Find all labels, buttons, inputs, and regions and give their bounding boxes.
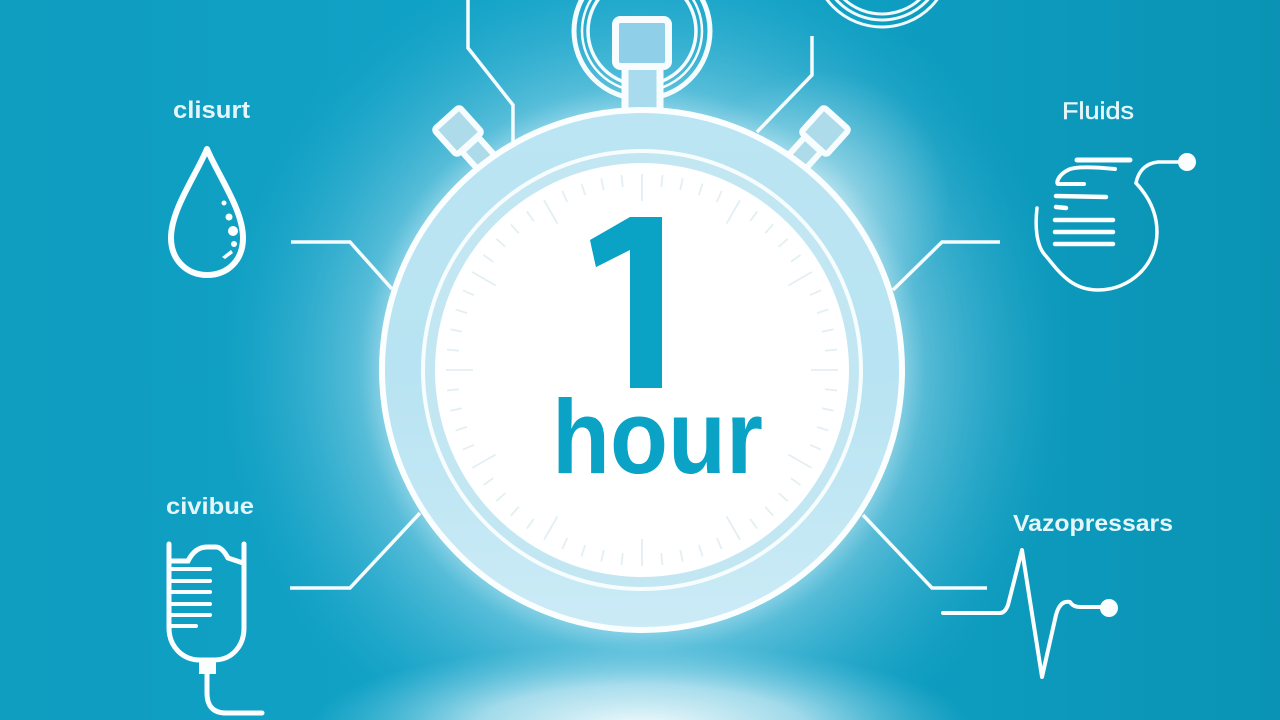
icon: fluids [1036, 153, 1196, 290]
label: bottom left: civibue [166, 493, 254, 519]
icon: iv bag [169, 544, 262, 713]
label: top left: clisurt [173, 97, 250, 124]
right pusher [782, 107, 849, 177]
clock face [435, 163, 849, 577]
icon: top right rings [813, 0, 951, 27]
crown neck [625, 66, 660, 112]
stopwatch [382, 0, 902, 630]
connector: left lower [290, 513, 420, 588]
connector: left upper [291, 242, 392, 289]
hour label: hour [552, 379, 763, 496]
label: top right: Fluids [1062, 98, 1134, 125]
connector: top left [468, 0, 513, 142]
connector: right upper [893, 242, 1000, 290]
big number: 1 [574, 163, 712, 441]
crown ring [574, 0, 710, 99]
icon: water drop [171, 149, 243, 275]
label: bottom right: Vazopressars [1013, 510, 1173, 536]
left pusher [434, 107, 501, 177]
inner ring [423, 151, 861, 589]
tick marks [432, 160, 852, 580]
outer case [382, 110, 902, 630]
crown head [616, 20, 668, 66]
connector: top right [757, 36, 812, 132]
connector: right lower [863, 515, 987, 588]
icon: heartbeat [943, 550, 1118, 677]
